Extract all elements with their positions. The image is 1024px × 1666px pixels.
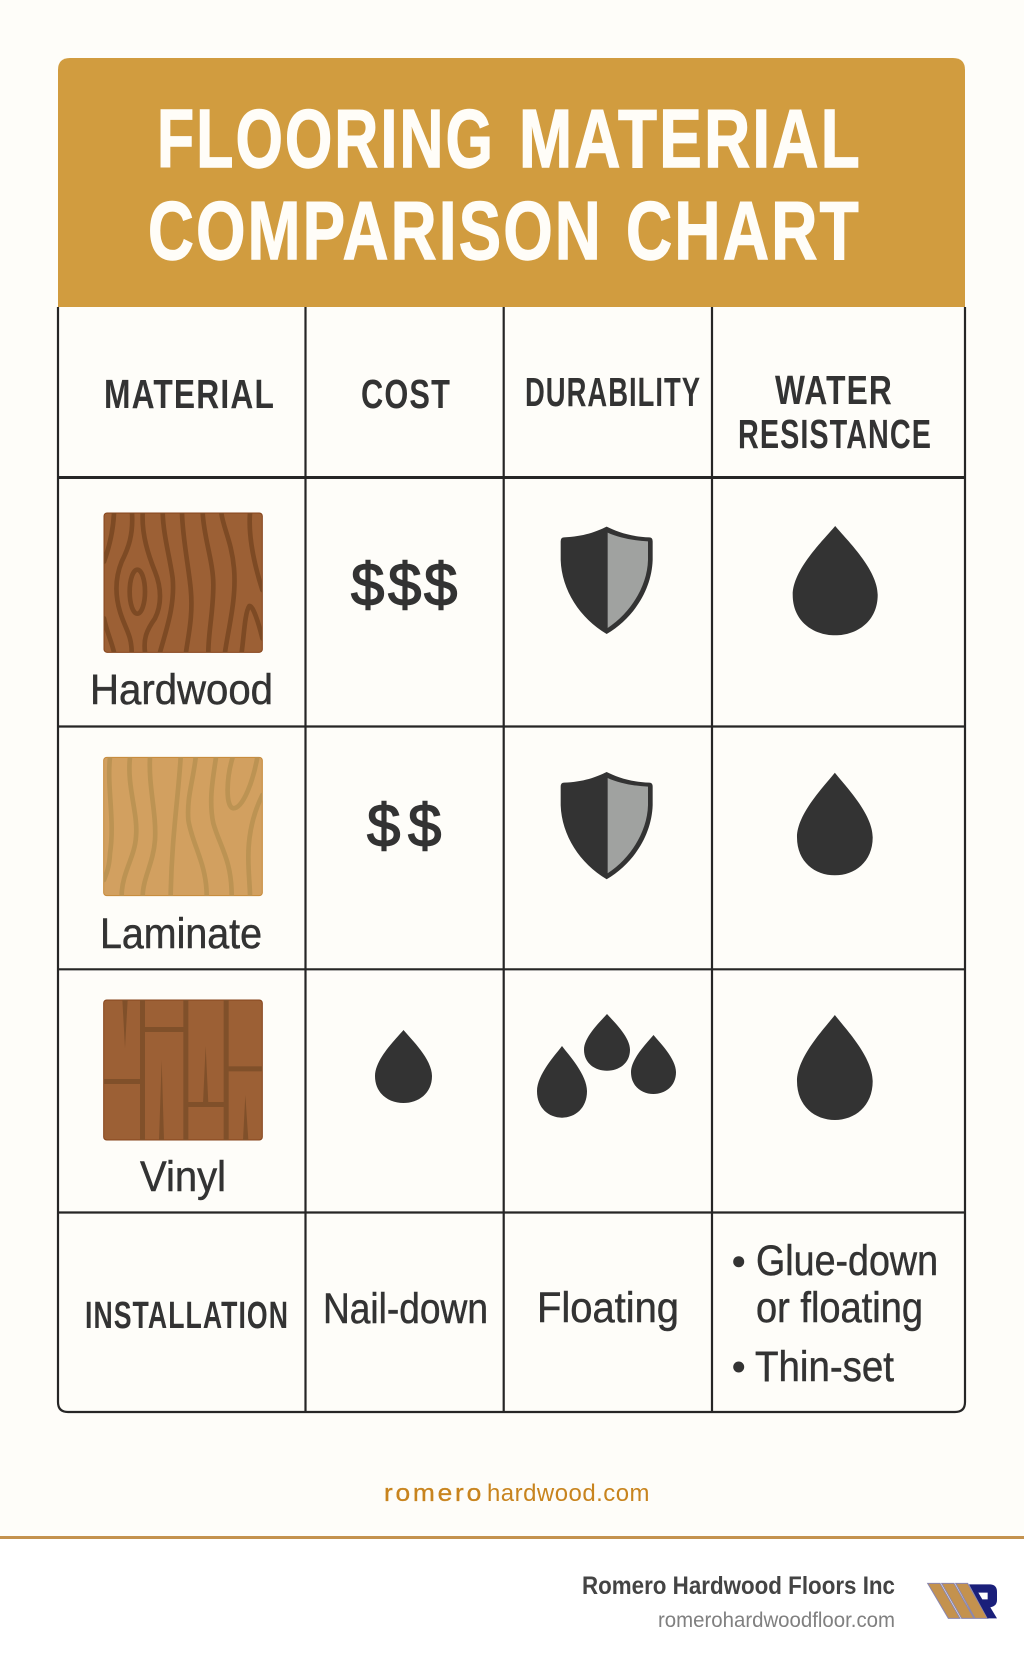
header: durability: DURABILITY [525,369,701,415]
installation: vinyl methods list: Thin-set [755,1343,894,1391]
website link: hardwood.com [487,1480,650,1507]
label: hardwood: Hardwood [90,666,273,714]
row label: installation: INSTALLATION [85,1295,289,1337]
header: material: MATERIAL [104,371,275,417]
water drop: hardwood [793,526,878,635]
header: cost: COST [361,371,451,417]
title: COMPARISON [148,184,603,277]
hardwood swatch [104,513,262,652]
durability shield: hardwood [561,527,653,634]
installation: floating: Floating [537,1284,679,1332]
comparison table grid [58,307,965,1412]
footer band [0,1536,1024,1666]
title: CHART [626,184,861,277]
installation: vinyl methods list: Glue-down [756,1237,938,1285]
cost: two dollars: $$ [367,792,441,859]
cost: single drop [375,1030,432,1103]
label: vinyl: Vinyl [140,1153,226,1201]
logo [928,1583,997,1618]
installation: nail-down: Nail-down [323,1285,488,1333]
title: MATERIAL [519,92,862,185]
company url: romerohardwoodfloor.com [658,1609,895,1632]
title: FLOORING [157,92,495,185]
cost: three dollars: $$$ [351,551,457,618]
laminate swatch [104,757,262,896]
label: laminate: Laminate [100,910,262,958]
company name: Romero Hardwood Floors Inc [582,1572,895,1600]
header: water resistance: RESISTANCE [738,411,932,457]
water drop: vinyl [797,1015,873,1120]
website link: romero [384,1480,484,1507]
website link [384,1480,650,1507]
header: water resistance [738,367,932,457]
title [148,92,862,277]
installation: vinyl methods list: or floating [756,1284,923,1332]
water drop: laminate [797,773,873,875]
vinyl swatch [104,1000,262,1140]
durability: three drops [537,1014,676,1118]
title banner [58,58,965,307]
header: water resistance: WATER [775,367,893,413]
durability shield: laminate [561,772,653,879]
installation: vinyl methods list [733,1237,938,1391]
